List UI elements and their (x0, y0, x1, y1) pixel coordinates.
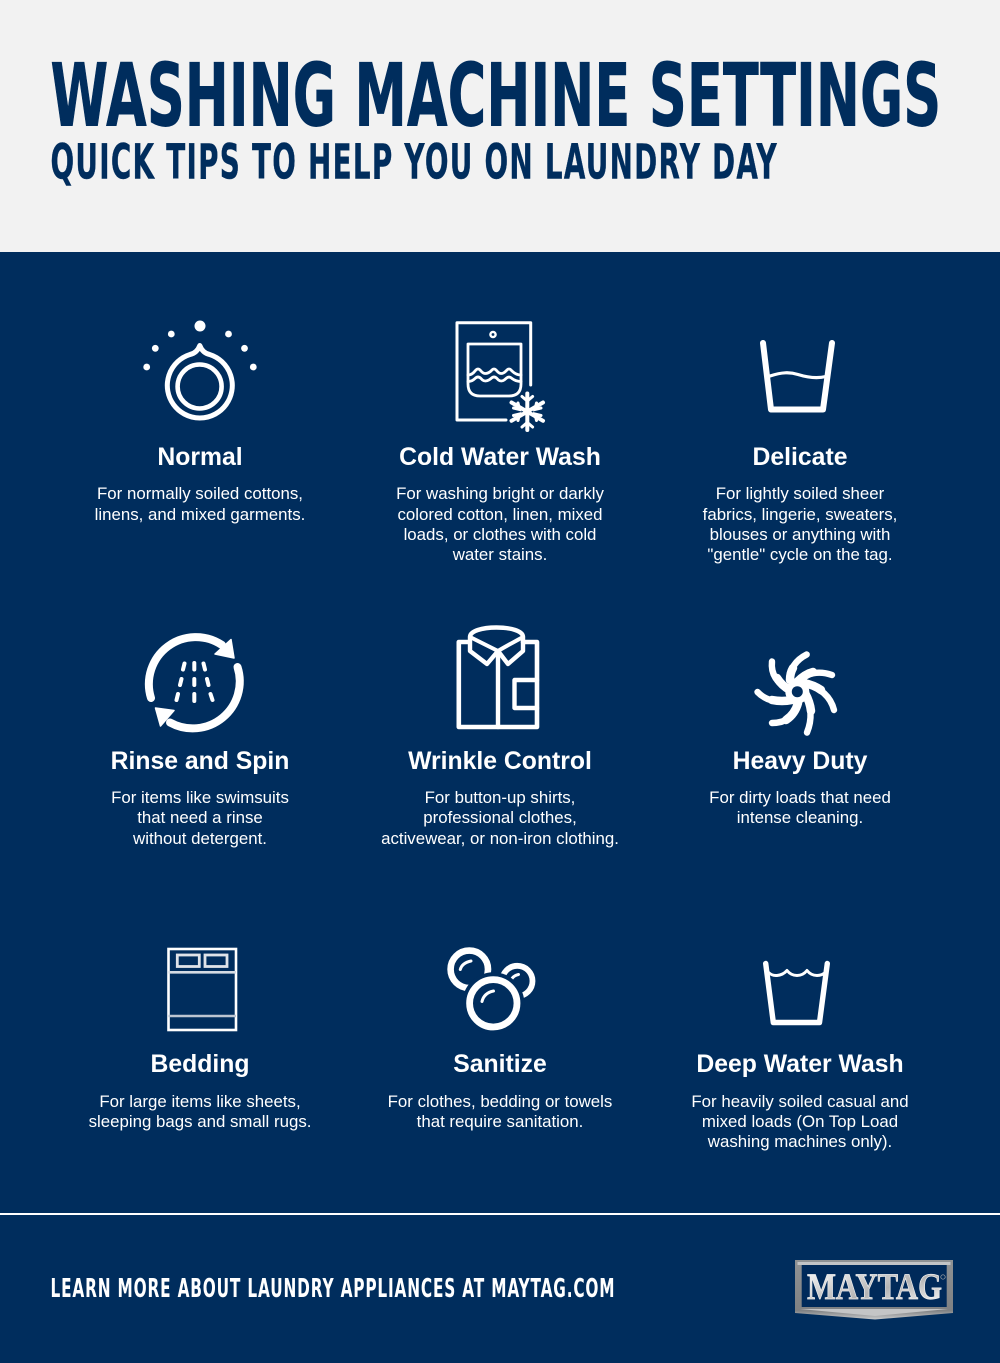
text: normal: linens, and mixed garments. (95, 505, 305, 524)
text: cold water wash: water stains. (452, 545, 547, 564)
text: delicate: blouses or anything with (710, 525, 890, 544)
text: deep water wash: washing machines only). (707, 1132, 892, 1151)
text: rinse and spin: without detergent. (132, 829, 267, 848)
heading: wrinkle control: Wrinkle Control (408, 748, 592, 775)
header band (0, 0, 1000, 252)
icon: swirl (758, 654, 834, 732)
panel: deep water wash (691, 964, 909, 1151)
footer divider (0, 1213, 1000, 1215)
subtitle: QUICK TIPS TO HELP YOU ON LAUNDRY DAY (50, 136, 777, 191)
text: rinse and spin: that need a rinse (137, 808, 263, 827)
text: normal: For normally soiled cottons, (97, 484, 303, 503)
heading: cold water wash: Cold Water Wash (399, 444, 601, 471)
panel: rinse and spin (111, 637, 289, 848)
heading: deep water wash: Deep Water Wash (696, 1051, 904, 1078)
text: cold water wash: colored cotton, linen, mixed (397, 505, 603, 524)
icon: shirt (459, 628, 537, 727)
text: deep water wash: For heavily soiled casual and (691, 1092, 909, 1111)
icon: washer with snowflake (457, 323, 543, 430)
text: bedding: sleeping bags and small rugs. (89, 1112, 311, 1131)
text: bedding: For large items like sheets, (99, 1092, 301, 1111)
icon: bubbles (451, 951, 532, 1034)
heading: delicate: Delicate (753, 444, 847, 471)
icon: cup with shallow water (763, 343, 832, 410)
heading: normal: Normal (157, 444, 243, 471)
panel: heavy duty (709, 654, 891, 827)
text: wrinkle control: professional clothes, (423, 808, 577, 827)
text: heavy duty: For dirty loads that need (709, 788, 891, 807)
icon: cup with deep water (766, 964, 827, 1022)
text: sanitize: that require sanitation. (417, 1112, 583, 1131)
footer call to action: LEARN MORE ABOUT LAUNDRY APPLIANCES AT MAYTAG.COM (50, 1274, 615, 1304)
heading: heavy duty: Heavy Duty (733, 748, 868, 775)
panel: normal (95, 320, 305, 524)
icon: rotating arrows with shower (149, 637, 240, 728)
text: cold water wash: loads, or clothes with cold (404, 525, 596, 544)
text: delicate: For lightly soiled sheer (716, 484, 885, 503)
text: rinse and spin: For items like swimsuits (111, 788, 289, 807)
icon: dial (143, 320, 257, 418)
panel: sanitize (388, 951, 612, 1131)
text: sanitize: For clothes, bedding or towels (388, 1092, 612, 1111)
text: delicate: fabrics, lingerie, sweaters, (703, 505, 897, 524)
panel: bedding (89, 949, 311, 1131)
panel: cold water wash (396, 323, 604, 564)
text: wrinkle control: For button-up shirts, (425, 788, 575, 807)
panel: wrinkle control (381, 628, 619, 848)
heading: bedding: Bedding (150, 1051, 250, 1078)
title: WASHING MACHINE SETTINGS (50, 46, 941, 146)
logo: maytag (795, 1260, 953, 1320)
logo: maytag: MAYTAG (807, 1267, 942, 1308)
text: heavy duty: intense cleaning. (737, 808, 863, 827)
icon: bed (168, 949, 236, 1030)
text: deep water wash: mixed loads (On Top Load (702, 1112, 898, 1131)
text: cold water wash: For washing bright or darkly (396, 484, 604, 503)
heading: sanitize: Sanitize (453, 1051, 547, 1078)
heading: rinse and spin: Rinse and Spin (111, 748, 289, 775)
text: wrinkle control: activewear, or non-iron clothing. (381, 829, 619, 848)
text: delicate: "gentle" cycle on the tag. (707, 545, 893, 564)
panel: delicate (703, 343, 897, 564)
